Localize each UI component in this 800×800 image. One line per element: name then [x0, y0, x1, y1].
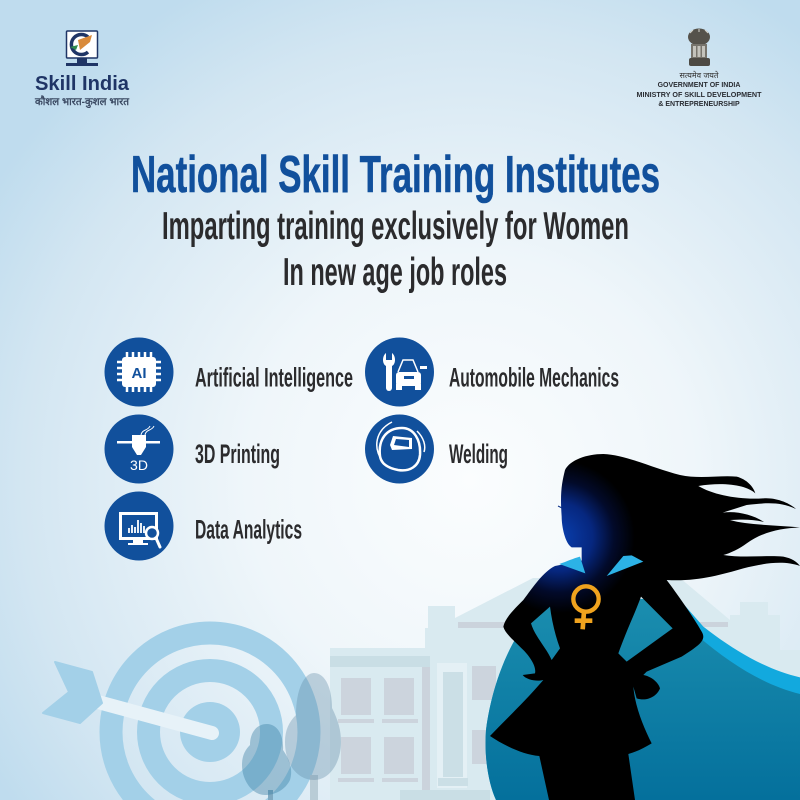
cape collar [559, 555, 643, 576]
building illustration [330, 578, 800, 800]
icon: 3D printer [104, 414, 174, 484]
icon: AI chip [104, 338, 174, 406]
icon: welding helmet [365, 414, 434, 484]
icon: monitor with magnifier [104, 492, 174, 560]
motto: सत्यमेव जयते [680, 70, 719, 80]
item: 3D Printing [104, 414, 280, 484]
label: Automobile Mechanics [449, 362, 619, 392]
icon: wrench and car [365, 338, 434, 406]
target with arrow [43, 633, 309, 800]
label: Artificial Intelligence [195, 362, 353, 392]
ministry name: MINISTRY OF SKILL DEVELOPMENT [636, 92, 762, 99]
item: Automobile Mechanics [365, 338, 619, 406]
trees [242, 673, 341, 800]
cape [486, 597, 800, 800]
ministry name [636, 82, 762, 108]
item: Welding [365, 414, 508, 484]
item: Artificial Intelligence [104, 338, 353, 406]
icon: AI chip: AI [132, 365, 146, 382]
label: 3D Printing [195, 439, 280, 469]
national emblem [688, 28, 710, 66]
label: Welding [449, 439, 508, 469]
ministry name: GOVERNMENT OF INDIA [658, 82, 740, 89]
label: Data Analytics [195, 514, 302, 544]
monitor icon [66, 31, 98, 66]
item: Data Analytics [104, 492, 302, 560]
subtitle line 2: In new age job roles [283, 251, 507, 294]
Ministry logo [636, 28, 762, 108]
Skill India logo [34, 31, 130, 109]
icon: 3D printer: 3D [130, 457, 148, 473]
woman silhouette [490, 454, 800, 800]
female symbol [573, 586, 599, 629]
Hindi tagline: कौशल भारत-कुशल भारत [34, 95, 130, 109]
Skill India wordmark: Skill India [35, 73, 130, 95]
ministry name: & ENTREPRENEURSHIP [658, 101, 740, 108]
